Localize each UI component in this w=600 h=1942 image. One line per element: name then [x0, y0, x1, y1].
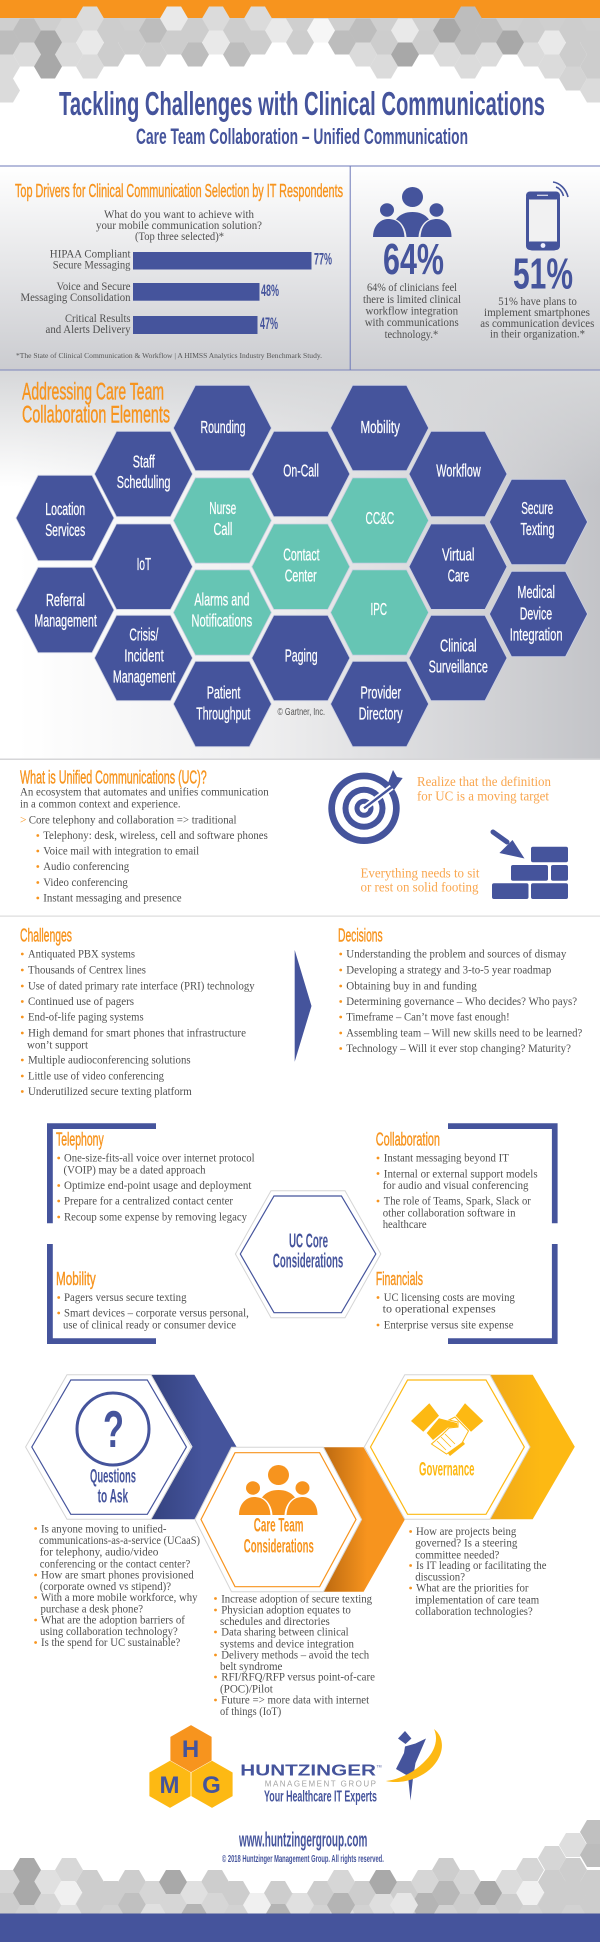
hexagon labels: Provider [360, 682, 401, 702]
step: questions to ask [26, 1375, 236, 1519]
mobility list: Smart devices – corporate versus personal, [64, 1308, 249, 1320]
decisions list [346, 949, 582, 1055]
financials list [383, 1292, 515, 1331]
logo: Huntzinger wordmark: MANAGEMENT GROUP [265, 1780, 376, 1788]
bottom blue bar [0, 1914, 600, 1942]
mobility list: use of clinical ready or consumer device [63, 1319, 236, 1331]
hexagon labels: Staff [133, 451, 155, 471]
arrow: challenges to decisions [295, 950, 312, 1062]
challenges list [27, 949, 255, 1098]
hexagon labels: IPC [370, 599, 387, 619]
hexagons: teal [173, 478, 429, 655]
decisions list: Technology – Will it ever stop changing? Maturity? [346, 1043, 571, 1055]
hexagon labels: Surveillance [429, 657, 488, 677]
hexagon labels: On-Call [283, 461, 319, 481]
hexagon labels: Crisis/ [129, 625, 158, 645]
chevron: blue [151, 1375, 236, 1519]
list: questions to ask: (corporate owned vs stipend)? [40, 1581, 171, 1593]
UC definition text: Audio conferencing [43, 861, 129, 873]
list: governance: What are the priorities for [416, 1583, 529, 1595]
list: questions to ask: conferencing or the contact center? [40, 1558, 190, 1570]
bar chart: Voice and Secure [56, 281, 130, 293]
hexagon labels: Paging [285, 646, 318, 666]
challenges list: Use of dated primary rate interface (PRI) technology [28, 980, 255, 992]
top orange bar [0, 0, 600, 18]
hexagon labels: Management [113, 667, 175, 687]
heading: challenges: Challenges [20, 926, 72, 946]
panel: collaboration [376, 1123, 558, 1231]
stat: 64 percent: technology.* [385, 329, 438, 341]
survey question: What do you want to achieve with [104, 209, 254, 221]
heading: mobility: Mobility [56, 1269, 96, 1289]
callout: solid footing [360, 865, 480, 895]
stat: 64 percent: workflow integration [366, 306, 458, 318]
hexagon labels: Mobility [360, 417, 400, 437]
survey question [96, 209, 262, 243]
bar chart: Critical Results [65, 313, 131, 325]
hexagon labels: Location [45, 499, 85, 519]
top hexagon pattern [0, 6, 600, 102]
bar chart: 77% [314, 250, 332, 268]
mobility list: Pagers versus secure texting [64, 1292, 187, 1304]
logo: HMG hexagons: M [160, 1772, 180, 1799]
hexagon labels: Secure [521, 498, 553, 518]
hexagon labels: Center [285, 566, 317, 586]
icon: people [373, 187, 452, 237]
survey question: (Top three selected)* [135, 231, 224, 243]
hexagon labels: Management [34, 611, 97, 631]
step: care team considerations: Considerations [244, 1536, 314, 1557]
hexagon labels: Throughput [196, 703, 250, 723]
challenges list: Little use of video conferencing [28, 1070, 164, 1082]
callout: solid footing: Everything needs to sit [360, 865, 480, 880]
step: care team considerations [195, 1447, 405, 1592]
challenges list: Multiple audioconferencing solutions [28, 1055, 191, 1067]
heading: telephony: Telephony [56, 1130, 104, 1150]
list: care team considerations: Future => more data with internet [221, 1694, 370, 1706]
UC definition text: An ecosystem that automates and unifies communication [20, 787, 269, 799]
callout: solid footing: or rest on solid footing [360, 880, 479, 895]
bottom hexagon pattern [0, 1820, 600, 1928]
heading: addressing care team: Collaboration Elements [22, 402, 170, 429]
hexagon labels: Call [214, 519, 232, 539]
hexagon labels: Texting [520, 519, 554, 539]
list: questions to ask [34, 1523, 200, 1649]
stat: 64 percent: with communications [365, 317, 459, 329]
chevron: orange [321, 1447, 405, 1592]
list: governance: committee needed? [415, 1549, 499, 1561]
list: questions to ask: Is the spend for UC sustainable? [41, 1637, 180, 1649]
list: care team considerations: schedules and directories [220, 1616, 330, 1628]
list: questions to ask: for telephony, audio/video [40, 1547, 159, 1559]
UC definition text: Voice mail with integration to email [43, 846, 199, 858]
financials list: to operational expenses [383, 1304, 496, 1316]
center hexagon: UC core considerations: UC Core [289, 1231, 328, 1253]
decisions list: Determining governance – Who decides? Who pays? [346, 996, 577, 1008]
decisions list: Understanding the problem and sources of dismay [346, 949, 567, 961]
challenges list: Antiquated PBX systems [28, 949, 135, 961]
bar chart: HIPAA Compliant [50, 248, 131, 260]
financials list: Enterprise versus site expense [384, 1319, 514, 1331]
hexagon labels: Rounding [200, 417, 246, 437]
list: governance [409, 1526, 546, 1618]
panel: challenges [20, 926, 255, 1098]
chevron: yellow [490, 1375, 575, 1519]
financials list: UC licensing costs are moving [384, 1292, 515, 1304]
hexagon labels: Clinical [440, 636, 477, 656]
list: questions to ask: using collaboration technology? [40, 1626, 178, 1638]
step: care team considerations: Care Team [254, 1516, 304, 1537]
list: governance: governed? Is a steering [415, 1538, 518, 1550]
bar chart: 47% [260, 314, 278, 333]
UC definition text: Video conferencing [43, 877, 128, 889]
step: questions to ask: Questions [90, 1466, 136, 1487]
challenges list: won’t support [27, 1039, 89, 1051]
stat: 51 percent: as communication devices [480, 318, 595, 330]
challenges list: Continued use of pagers [28, 996, 134, 1008]
hexagon labels [34, 417, 563, 723]
heading: top drivers: Top Drivers for Clinical Communication Selection by IT Respondents [15, 181, 343, 201]
list: questions to ask: With a more mobile workforce, why [41, 1592, 198, 1604]
bar chart: 48% [261, 281, 279, 300]
hexagon labels: Nurse [209, 498, 236, 518]
list: questions to ask: communications-as-a-service (UCaaS) [39, 1535, 200, 1547]
decisions list: Timeframe – Can’t move fast enough! [346, 1012, 510, 1024]
icon: handshake [411, 1403, 483, 1456]
hexagon labels: CC&C [366, 508, 394, 528]
challenges list: Thousands of Centrex lines [28, 964, 146, 976]
list: governance: discussion? [415, 1572, 465, 1584]
hexagon labels: Device [520, 603, 552, 623]
list: governance: implementation of care team [415, 1594, 539, 1606]
panel: decisions [338, 926, 582, 1055]
hexagon labels: Patient [207, 682, 240, 702]
UC definition text: in a common context and experience. [20, 798, 181, 810]
hexagon labels: Referral [46, 590, 85, 610]
hexagon labels: Services [45, 520, 85, 540]
list: governance: collaboration technologies? [415, 1606, 533, 1618]
bar chart: Secure Messaging [53, 260, 131, 272]
step: governance: Governance [419, 1460, 474, 1481]
callout: moving target: Realize that the definition [417, 774, 551, 789]
list: questions to ask: How are smart phones provisioned [41, 1569, 194, 1581]
telephony list: Optimize end-point usage and deployment [64, 1180, 252, 1192]
list: care team considerations: systems and device integration [220, 1638, 354, 1650]
list: care team considerations: Increase adoption of secure texting [221, 1593, 372, 1605]
hexagon labels: Medical [517, 582, 555, 602]
decisions list: Obtaining buy in and funding [346, 980, 477, 992]
list: governance: How are projects being [416, 1526, 517, 1538]
footnote: *The State of Clinical Communication & Workflow | A HIMSS Analytics Industry Benchmark Study. [16, 351, 322, 360]
telephony list: Recoup some expense by removing legacy [64, 1211, 247, 1223]
logo: runner figure [386, 1729, 442, 1800]
center hexagon: UC core considerations: Considerations [273, 1251, 343, 1273]
icon: target with arrow [328, 770, 403, 844]
list: governance: Is IT leading or facilitating the [416, 1560, 546, 1572]
hexagon labels: Workflow [436, 461, 481, 481]
heading: addressing care team [22, 378, 170, 429]
icon: question mark: ? [103, 1401, 124, 1459]
panel: survey statistics [0, 166, 600, 370]
title [59, 85, 545, 149]
UC definition text: > [20, 814, 26, 826]
list: care team considerations: Physician adoption equates to [221, 1604, 351, 1616]
hexagon labels: Directory [359, 703, 403, 723]
heading: what is UC: What is Unified Communications (UC)? [20, 768, 207, 788]
hexagon labels: Alarms and [194, 590, 249, 610]
challenges list: End-of-life paging systems [28, 1012, 144, 1024]
collaboration list: Internal or external support models [384, 1168, 538, 1180]
list: care team considerations: Data sharing between clinical [221, 1627, 349, 1639]
heading: collaboration: Collaboration [376, 1130, 440, 1150]
logo: Huntzinger wordmark [240, 1763, 382, 1806]
telephony list: (VOIP) may be a dated approach [64, 1164, 206, 1176]
stat: 64 percent: 64% [383, 235, 444, 284]
logo: Huntzinger wordmark: TM [376, 1764, 382, 1768]
hexagon labels: Virtual [442, 545, 474, 565]
collaboration list: healthcare [383, 1219, 427, 1231]
logo: HMG hexagons: G [202, 1772, 221, 1799]
list: care team considerations: RFI/RFQ/RFP versus point-of-care [221, 1672, 375, 1684]
mobility list [63, 1292, 249, 1331]
stat: 51 percent: 51% [513, 250, 573, 299]
icon: smartphone with signal [526, 182, 568, 250]
hexagons: blue [16, 385, 588, 747]
UC definition text: Instant messaging and presence [43, 893, 182, 905]
hexagon labels: Integration [510, 625, 563, 645]
list: care team considerations: Delivery methods – avoid the tech [221, 1649, 369, 1661]
survey question: your mobile communication solution? [96, 220, 262, 232]
challenges list: High demand for smart phones that infrastructure [28, 1027, 246, 1039]
panel: care team collaboration elements [0, 370, 600, 760]
telephony list: One-size-fits-all voice over internet protocol [64, 1153, 255, 1165]
decisions list: Assembling team – Will new skills need to be learned? [346, 1027, 582, 1039]
stat: 51 percent: implement smartphones [484, 307, 590, 319]
icon: question mark [77, 1393, 149, 1465]
panel: telephony [47, 1123, 255, 1223]
list: care team considerations: (POC)/Pilot [220, 1683, 274, 1695]
bar chart: and Alerts Delivery [46, 324, 131, 336]
copyright: © 2018 Huntzinger Management Group. All rights reserved. [222, 1854, 384, 1865]
step: questions to ask: to Ask [98, 1487, 128, 1508]
logo: Huntzinger wordmark: HUNTZINGER [240, 1763, 377, 1780]
challenges list: Underutilized secure texting platform [28, 1086, 192, 1098]
hexagon labels: Scheduling [117, 472, 170, 492]
heading: decisions: Decisions [338, 926, 383, 946]
stat: 64 percent: there is limited clinical [363, 294, 461, 306]
callout: moving target: for UC is a moving target [417, 789, 549, 804]
hexagon labels: IoT [137, 554, 151, 574]
telephony list: Prepare for a centralized contact center [64, 1196, 233, 1208]
decisions list: Developing a strategy and 3-to-5 year roadmap [346, 965, 552, 977]
panel: mobility [47, 1244, 249, 1344]
collaboration list: Instant messaging beyond IT [384, 1153, 509, 1165]
stat: 64 percent [363, 235, 461, 341]
hexagon labels: Notifications [191, 611, 252, 631]
logo: Huntzinger wordmark: Your Healthcare IT Experts [264, 1789, 377, 1806]
panel: financials [376, 1244, 558, 1344]
UC definition text: Core telephony and collaboration => traditional [29, 814, 237, 826]
logo: HMG hexagons [149, 1725, 233, 1808]
heading: addressing care team: Addressing Care Team [22, 378, 164, 406]
list: care team considerations: belt syndrome [220, 1661, 282, 1673]
collaboration list: The role of Teams, Spark, Slack or [384, 1196, 531, 1208]
hexagon labels: Care [448, 566, 469, 586]
UC definition text [20, 787, 269, 905]
heading: financials: Financials [376, 1269, 423, 1289]
callout: moving target [417, 774, 551, 804]
icon: bricks and trowel [492, 832, 568, 899]
stat: 51 percent: 51% have plans to [498, 296, 577, 308]
list: questions to ask: What are the adoption barriers of [41, 1614, 185, 1626]
list: care team considerations [214, 1593, 375, 1718]
stat: 51 percent: in their organization.* [490, 328, 585, 340]
panel: what is unified communications [20, 768, 568, 905]
center hexagon: UC core considerations [235, 1191, 381, 1318]
gartner credit: © Gartner, Inc. [278, 706, 325, 718]
text: www.huntzingergroup.com [239, 1830, 367, 1852]
UC definition text: Telephony: desk, wireless, cell and software phones [43, 830, 268, 842]
logo: HMG hexagons: H [182, 1736, 199, 1763]
collaboration list: for audio and visual conferencing [383, 1180, 529, 1192]
hexagon labels: Contact [283, 545, 320, 565]
stat: 51 percent [480, 250, 595, 340]
list: care team considerations: of things (IoT) [220, 1706, 281, 1718]
telephony list [64, 1153, 255, 1223]
list: questions to ask: purchase a desk phone? [40, 1604, 143, 1616]
stat: 64 percent: 64% of clinicians feel [367, 282, 457, 294]
list: questions to ask: Is anyone moving to unified- [41, 1523, 167, 1535]
step: governance [364, 1375, 575, 1519]
bar chart: Messaging Consolidation [20, 292, 131, 304]
collaboration list [383, 1153, 538, 1231]
icon: care team people [239, 1465, 318, 1515]
hexagon labels: Incident [124, 646, 164, 666]
bar chart [20, 248, 332, 336]
collaboration list: other collaboration software in [383, 1207, 516, 1219]
